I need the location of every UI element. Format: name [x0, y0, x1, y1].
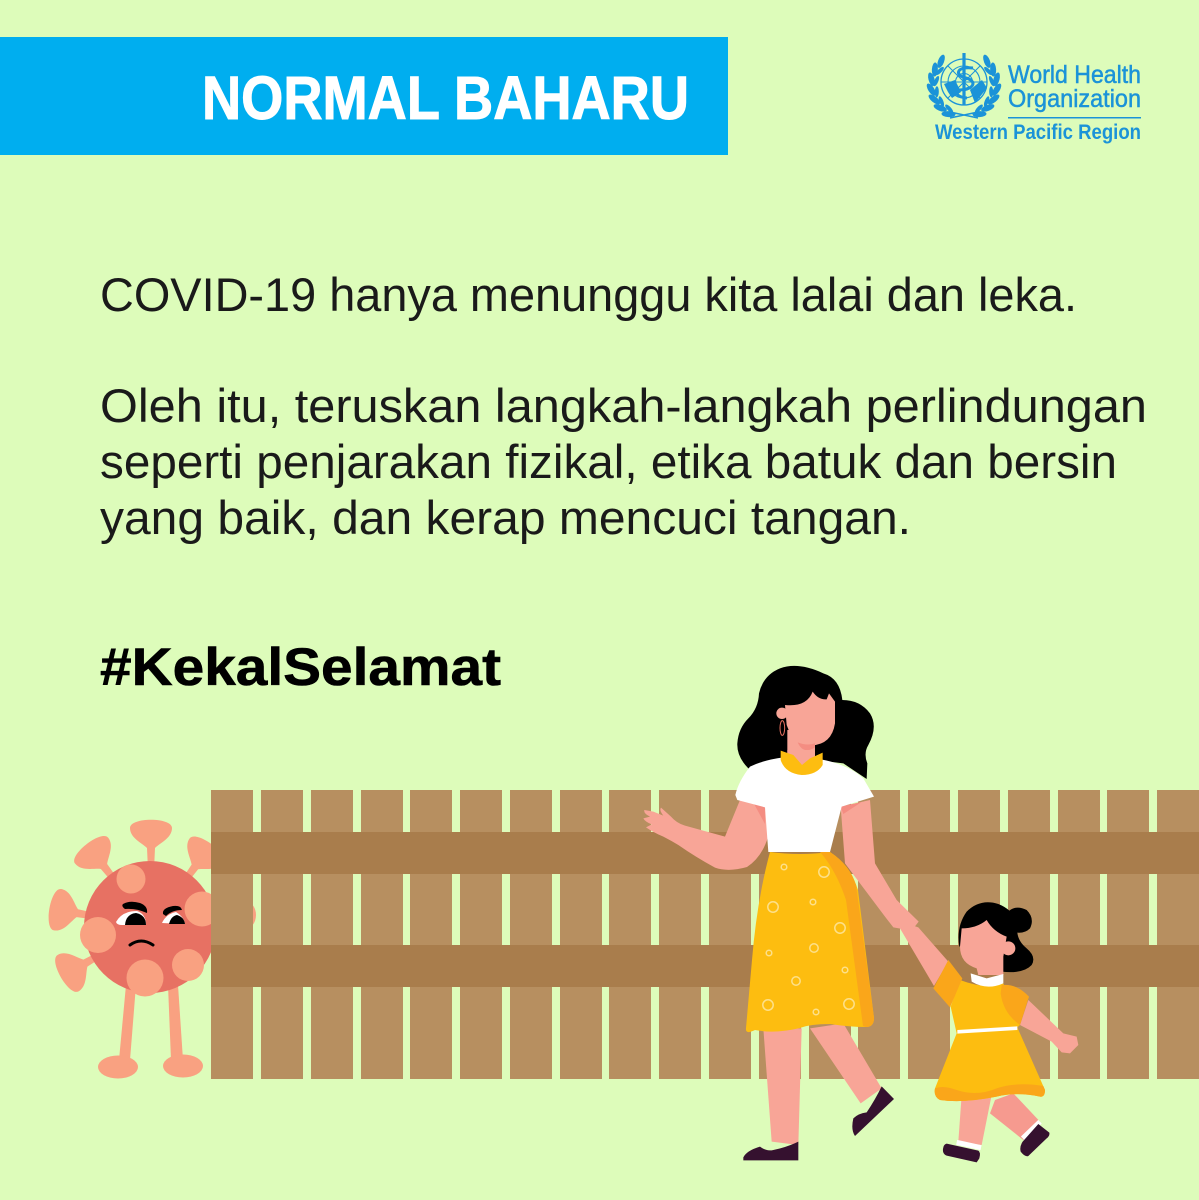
collar	[781, 751, 823, 775]
virus legs	[98, 985, 203, 1078]
icon: WHO emblem	[925, 53, 1003, 118]
fence rails	[211, 832, 1199, 987]
body text: Oleh itu, teruskan langkah-langkah perlindungan	[100, 379, 1147, 432]
girl collar	[971, 973, 1003, 987]
logo text: Organization	[1008, 85, 1141, 113]
dress	[935, 980, 1045, 1101]
girl legs	[958, 1093, 1040, 1145]
title banner: NORMAL BAHARU	[202, 64, 689, 132]
left sleeve	[933, 960, 962, 1007]
logo text	[935, 61, 1141, 144]
woman upper body	[643, 666, 919, 931]
right arm of woman	[841, 800, 919, 931]
virus character	[46, 820, 256, 1078]
girl free arm	[1020, 1000, 1078, 1053]
laurel right	[972, 54, 1003, 117]
WHO logo	[925, 53, 1141, 144]
fence pickets	[211, 790, 1199, 1079]
girl raised arm	[900, 924, 948, 986]
dress belt	[957, 1026, 1017, 1034]
title banner	[0, 37, 728, 155]
girl	[900, 902, 1078, 1162]
right sleeve	[1001, 985, 1029, 1025]
virus body	[84, 861, 216, 993]
virus face	[116, 902, 185, 945]
body text: seperti penjarakan fizikal, etika batuk dan bersin	[100, 435, 1117, 488]
woman	[643, 666, 919, 1160]
logo text: Western Pacific Region	[935, 121, 1141, 144]
body text	[100, 268, 1147, 544]
body text: COVID-19 hanya menunggu kita lalai dan leka.	[100, 268, 1077, 321]
laurel left	[925, 54, 956, 117]
shirt	[735, 757, 874, 852]
virus spots	[80, 864, 220, 996]
woman face	[787, 730, 815, 762]
logo text: World Health	[1008, 61, 1141, 89]
woman legs and shoes	[743, 1023, 894, 1160]
neck opening	[787, 750, 815, 767]
girl hair	[959, 902, 1033, 972]
girl socks and shoes	[943, 1122, 1049, 1162]
skirt	[746, 852, 874, 1032]
left arm of woman	[643, 800, 768, 870]
girl face	[960, 920, 1007, 975]
sleeve shadows	[753, 802, 862, 824]
dress hem	[935, 1084, 1045, 1101]
fence	[211, 790, 1199, 1079]
body text: yang baik, dan kerap mencuci tangan.	[100, 491, 911, 544]
hashtag: #KekalSelamat	[100, 638, 501, 697]
virus spikes	[46, 820, 256, 995]
woman hair	[737, 666, 874, 779]
